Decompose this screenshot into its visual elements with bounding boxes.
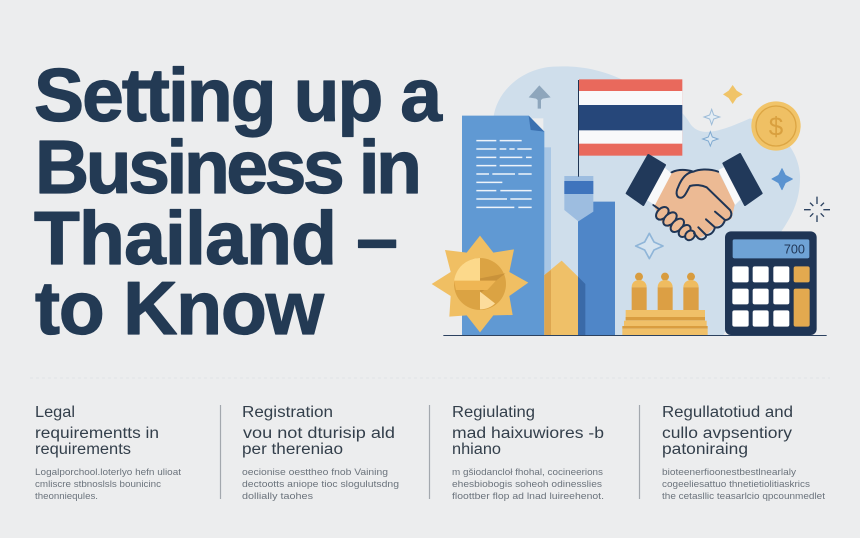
temple <box>622 273 708 335</box>
column: registration: dollially taohes <box>242 491 313 502</box>
column: registration: oecionise oesttheo fnob Vaining <box>242 467 388 478</box>
column: legal: requirements <box>35 441 131 458</box>
icon: coin <box>751 101 801 151</box>
column: legal: requirementts in <box>35 425 159 442</box>
column: legal: Legal <box>35 404 75 421</box>
icon: coin: $ <box>769 111 784 141</box>
column: regulatory: patoniraing <box>662 441 748 458</box>
column: regulatory: Regullatotiud and <box>662 404 793 421</box>
tower <box>564 176 615 335</box>
title: Thailand – <box>34 196 398 280</box>
column: regulating: floottber flop ad lnad luireehenot. <box>452 491 604 502</box>
column: regulating: Regiulating <box>452 404 535 421</box>
column: registration: vou not dturisip ald <box>243 425 395 442</box>
calculator: 700 <box>784 242 805 256</box>
column: regulating <box>452 404 604 502</box>
column: regulatory <box>662 404 825 502</box>
column: legal: cmliscre stbnoslsls bounicinc <box>35 479 161 490</box>
column: regulatory: bioteenerfioonestbestlnearlaly <box>662 467 796 478</box>
document <box>462 116 551 335</box>
column: registration <box>242 404 399 502</box>
calculator <box>725 231 817 335</box>
column: regulatory: cogeeliesattuo thnetietiolitiaskrics <box>662 479 810 490</box>
title: Business in <box>35 125 422 209</box>
yellow house <box>544 261 578 335</box>
left cuff <box>647 167 672 205</box>
icon: arrow tree <box>529 85 551 109</box>
ground line <box>443 335 827 336</box>
column: registration: per thereniao <box>242 441 343 458</box>
column: regulating: mad haixuwiores -b <box>452 425 604 442</box>
title: to Know <box>35 266 325 350</box>
column: regulating: nhiano <box>452 441 501 458</box>
column: registration: dectootts aniope tioc slogulutsdng <box>242 479 399 490</box>
column: regulatory: the cetasllic teasarlcio qpcounmedlet <box>662 491 825 502</box>
column: regulating: m gšiodancloł fhohal, cocineerions <box>452 467 603 478</box>
flag <box>578 79 682 177</box>
title: Setting up a <box>34 53 443 137</box>
column: regulatory: cullo avpsentiory <box>662 425 792 442</box>
handshake <box>627 154 762 242</box>
column: regulating: ehesbiobogis soheoh odinesslies <box>452 479 602 490</box>
column: legal: Logalporchool.loterlyo hefn ulioat <box>35 467 181 478</box>
sun <box>432 236 528 332</box>
column: registration: Registration <box>242 404 333 421</box>
title <box>34 53 443 350</box>
icon: sparkles <box>636 85 830 259</box>
column: legal: theonniequles. <box>35 491 98 502</box>
column: legal <box>35 404 181 502</box>
illustration <box>432 66 830 336</box>
background blob <box>493 66 800 335</box>
right cuff <box>718 167 742 205</box>
